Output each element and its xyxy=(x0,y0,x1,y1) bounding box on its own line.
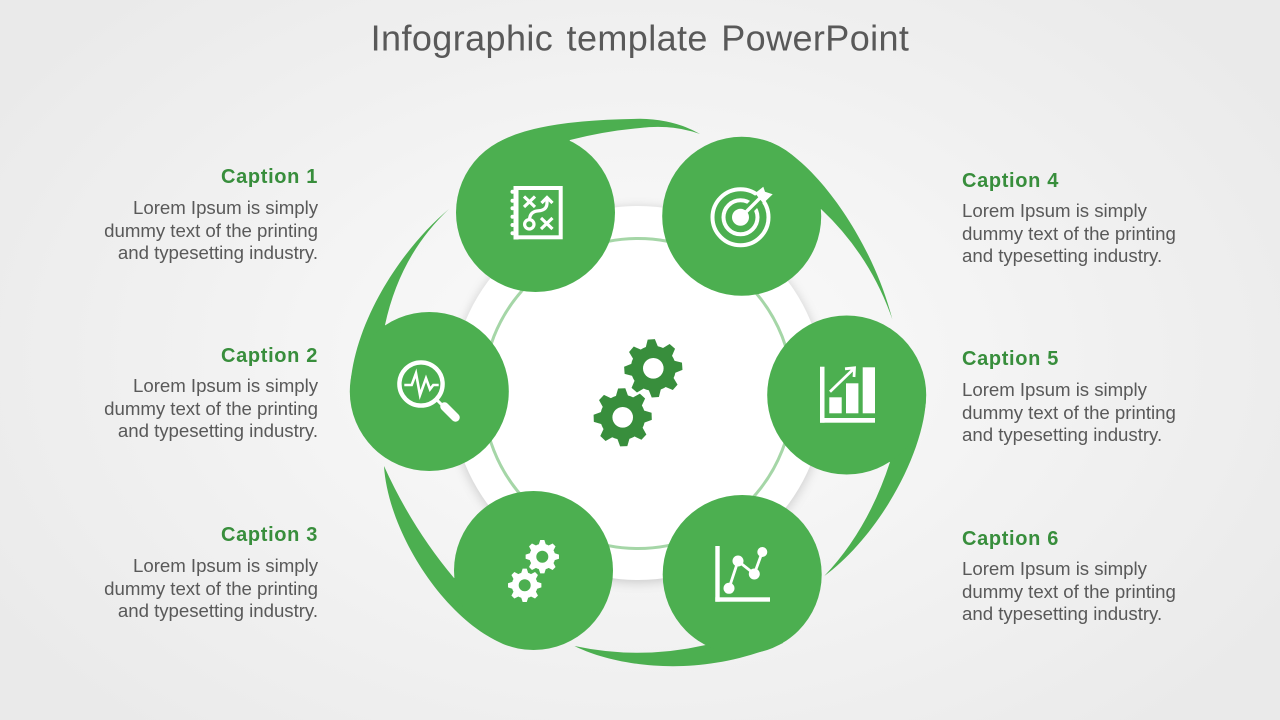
caption 2: Caption 2 xyxy=(221,345,318,367)
caption 5: and typesetting industry. xyxy=(962,424,1162,445)
caption 4: Caption 4 xyxy=(962,170,1059,192)
caption 4: and typesetting industry. xyxy=(962,245,1162,266)
node 5 with tail xyxy=(767,316,926,576)
caption 3 xyxy=(104,524,319,621)
central ring xyxy=(450,206,826,583)
node 6 with tail xyxy=(574,495,822,666)
caption 3: Caption 3 xyxy=(221,524,318,546)
caption 2 xyxy=(104,345,319,441)
caption 3: dummy text of the printing xyxy=(104,578,318,599)
caption 4 xyxy=(962,170,1176,266)
icon: strategy map xyxy=(510,186,561,240)
caption 2: Lorem Ipsum is simply xyxy=(133,375,319,396)
title: Infographic template PowerPoint xyxy=(371,18,909,58)
caption 5: Lorem Ipsum is simply xyxy=(962,379,1148,400)
node 3 with tail xyxy=(384,466,613,650)
icon: line chart xyxy=(715,546,770,602)
caption 2: and typesetting industry. xyxy=(118,420,318,441)
caption 1: dummy text of the printing xyxy=(104,220,318,241)
caption 6: and typesetting industry. xyxy=(962,603,1162,624)
caption 2: dummy text of the printing xyxy=(104,398,318,419)
caption 1: Caption 1 xyxy=(221,166,318,188)
caption 6: dummy text of the printing xyxy=(962,581,1176,602)
caption 3: Lorem Ipsum is simply xyxy=(133,555,319,576)
caption 5: dummy text of the printing xyxy=(962,402,1176,423)
caption 6 xyxy=(962,528,1176,624)
caption 6: Caption 6 xyxy=(962,528,1059,550)
node 1 with tail xyxy=(456,119,700,292)
caption 5 xyxy=(962,348,1176,445)
icon: small gears xyxy=(508,540,559,602)
caption 5: Caption 5 xyxy=(962,348,1059,370)
caption 4: dummy text of the printing xyxy=(962,223,1176,244)
icon: bar chart with arrow xyxy=(820,367,875,423)
icon: target with arrow xyxy=(712,187,773,245)
icon: magnifier with pulse xyxy=(399,362,456,418)
caption 3: and typesetting industry. xyxy=(118,600,318,621)
node 4 with tail xyxy=(662,137,892,319)
caption 4: Lorem Ipsum is simply xyxy=(962,200,1148,221)
caption 1: Lorem Ipsum is simply xyxy=(133,197,319,218)
icon: central gears xyxy=(593,337,684,447)
caption 1 xyxy=(104,166,319,263)
node 2 with tail xyxy=(350,209,509,471)
caption 6: Lorem Ipsum is simply xyxy=(962,558,1148,579)
caption 1: and typesetting industry. xyxy=(118,242,318,263)
